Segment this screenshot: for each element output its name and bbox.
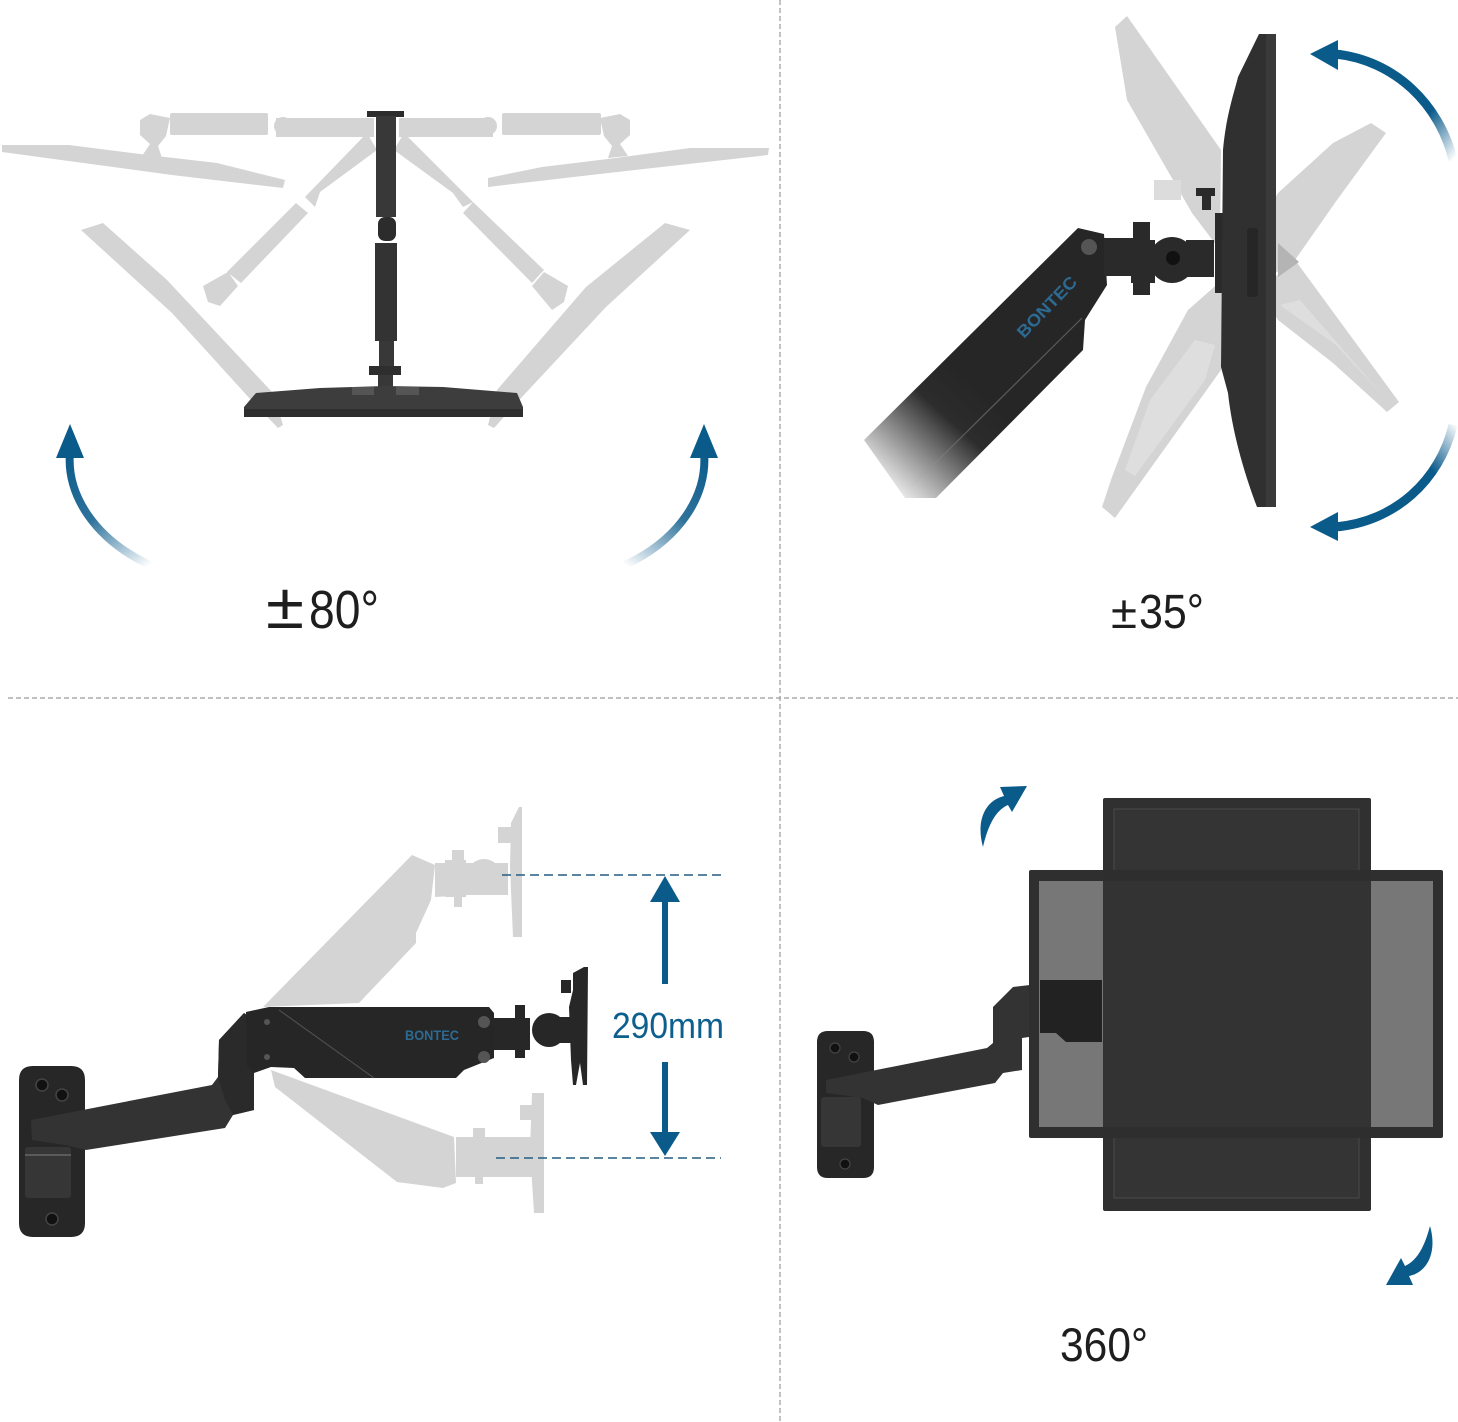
plate screw holes — [830, 1043, 859, 1169]
wall plate — [817, 1031, 874, 1178]
portrait monitor — [1103, 798, 1371, 1211]
arrow: lower — [650, 1062, 680, 1156]
label: 290mm: 290mm — [612, 1005, 724, 1046]
plate screw holes — [36, 1079, 68, 1225]
pivot bracket — [1104, 188, 1223, 295]
label: plus-minus 80 degrees — [266, 570, 379, 642]
panel: height 290mm — [19, 807, 726, 1237]
label: plus-minus 35 degrees: 35° — [1139, 586, 1204, 639]
label: plus-minus 80 degrees: ± — [266, 570, 304, 642]
wall plate — [19, 1066, 85, 1237]
arrow: tilt up — [1335, 54, 1453, 160]
gas-spring arm — [246, 1007, 494, 1078]
landscape monitor — [1029, 870, 1443, 1138]
arrow: rotate lower — [1386, 1226, 1432, 1285]
height guides — [496, 875, 726, 1158]
ghost upper and lower arms — [263, 807, 544, 1213]
arrow: tilt down — [1335, 425, 1453, 527]
label: 360 degrees: 360° — [1060, 1318, 1148, 1371]
hinge — [821, 1097, 861, 1147]
brand on arm: BONTEC — [1013, 272, 1081, 342]
hinge — [25, 1147, 71, 1198]
arrow: left swivel — [70, 452, 152, 566]
wall arm — [31, 1013, 254, 1150]
panel: swivel ±80° — [2, 111, 769, 642]
front monitor, side view — [1221, 34, 1276, 507]
arrow: right swivel — [623, 452, 704, 566]
label: plus-minus 80 degrees: 80° — [309, 580, 379, 640]
pivot and VESA plate — [494, 967, 588, 1085]
label: plus-minus 35 degrees — [1111, 586, 1204, 639]
ghost monitors and arms — [2, 113, 769, 428]
panel: rotation 360° — [817, 786, 1443, 1371]
panel: tilt ±35° — [864, 16, 1453, 639]
arm behind landscape screen — [1040, 980, 1102, 1042]
front monitor and arm — [244, 111, 523, 417]
brand: BONTEC — [405, 1027, 459, 1043]
arrow: rotate upper — [981, 786, 1027, 847]
arm with fading end — [864, 228, 1107, 498]
arrow: raise — [650, 876, 680, 984]
label: plus-minus 35 degrees: ± — [1111, 586, 1137, 638]
ghost tilted monitors — [1102, 16, 1399, 518]
wall arm — [826, 985, 1030, 1105]
